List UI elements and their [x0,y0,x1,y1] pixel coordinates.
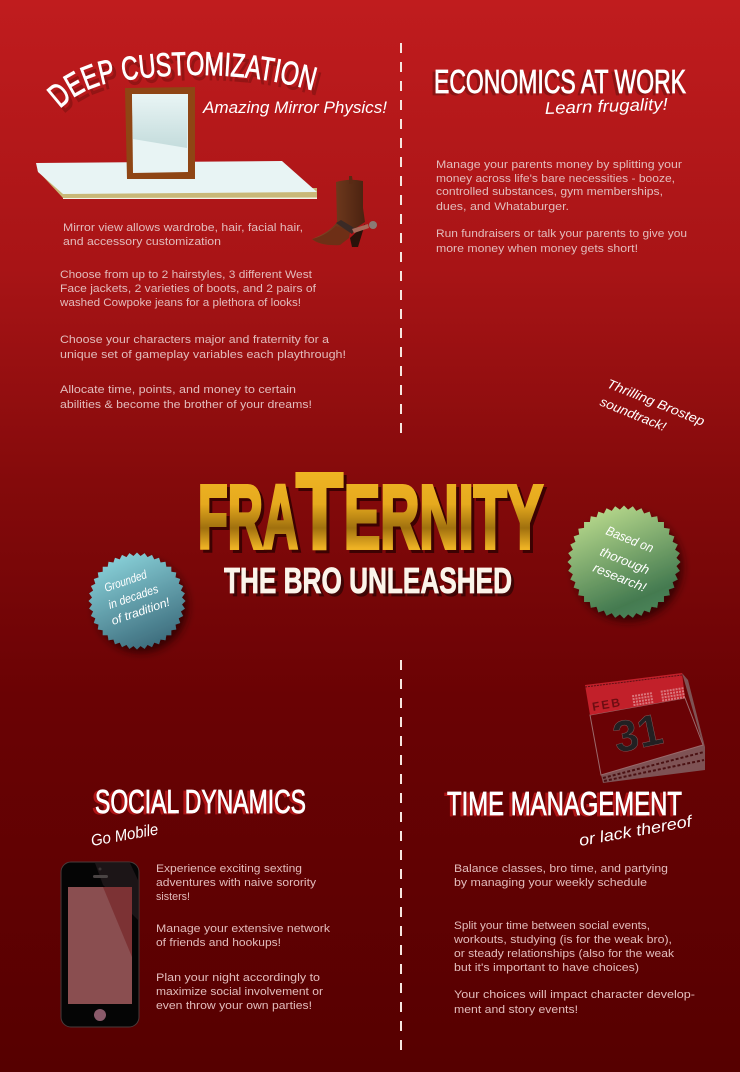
callout: thrilling brostep soundtrack: soundtrack! [598,394,669,434]
text: plan your night [156,972,323,1012]
icon: cowboy boot [312,176,377,247]
text: manage money: money across life's bare necessities - booze, [436,173,675,185]
text: mirror view: Mirror view allows wardrobe, hair, facial hair, [63,222,303,234]
text: plan your night: Plan your night accordingly to [156,972,320,984]
panel: social dynamics [61,783,331,1027]
icon: smartphone [61,862,139,1027]
text: allocate: abilities & become the brother of your dreams! [60,399,312,411]
text: sexting [156,863,317,903]
title: fraternity [198,450,546,574]
text: plan your night: maximize social involvement or [156,986,323,998]
subtitle: the bro unleashed [224,560,515,604]
subtitle: the bro unleashed: THE BRO UNLEASHED [227,563,515,604]
title: fraternity: T [299,453,346,574]
heading: social dynamics [92,783,306,821]
text: network [156,923,331,949]
text: mirror view: and accessory customization [63,236,221,248]
icon: calendar feb 31 [585,673,705,783]
text: your choices: ment and story events! [454,1004,578,1016]
badge: based on thorough research: Based on [604,523,656,556]
text: choose hairstyles: Choose from up to 2 hairstyles, 3 different West [60,269,312,281]
text: sexting: sisters! [156,891,190,903]
text: allocate [60,384,312,411]
text: fundraisers [436,228,687,255]
text: split your time: or steady relationships (also for the weak [454,948,675,960]
subheading: learn frugality: Learn frugality! [544,95,668,118]
heading: social dynamics: SOCIAL DYNAMICS [95,783,306,820]
badge: grounded in decades of tradition: of tradition! [109,595,172,628]
text: fundraisers: more money when money gets short! [436,243,638,255]
subtitle: the bro unleashed: THE BRO UNLEASHED [224,560,512,601]
badge: grounded in decades of tradition: in decades [106,582,160,612]
title: fraternity: ERNITY [344,468,543,568]
heading: social dynamics: SOCIAL DYNAMICS [92,784,303,821]
heading: deep customization: DEEP CUSTOMIZATION [46,51,318,108]
text: choose major: Choose your characters major and fraternity for a [60,334,330,346]
title: fraternity: ERNITY [347,471,546,571]
title: fraternity: FRA [198,468,298,568]
badge: based on thorough research: research! [591,560,649,595]
text: choose hairstyles: washed Cowpoke jeans for a plethora of looks! [59,297,301,309]
text: network: Manage your extensive network [156,923,331,935]
title: fraternity: FRA [201,471,301,571]
text: choose hairstyles [59,269,317,309]
badge: based on thorough research: thorough [598,544,652,577]
subheading: go mobile: Go Mobile [90,821,160,850]
text: choose major: unique set of gameplay variables each playthrough! [60,349,346,361]
text: balance classes: by managing your weekly schedule [454,877,647,889]
text: choose hairstyles: Face jackets, 2 varieties of boots, and 2 pairs of [60,283,317,295]
text: manage money: dues, and Whataburger. [436,201,569,213]
subheading: or lack thereof: or lack thereof [578,813,695,850]
badge: grounded in decades of tradition: Grounded [102,567,149,595]
text: network: of friends and hookups! [156,937,281,949]
title: fraternity: T [296,450,343,571]
text: sexting: adventures with naive sorority [156,877,317,889]
text: manage money: Manage your parents money by splitting your [436,159,682,171]
text: sexting: Experience exciting sexting [156,863,302,875]
panel: time management [444,673,705,1016]
text: split your time [453,920,675,974]
text: split your time: but it's important to have choices) [454,962,639,974]
text: your choices [454,989,695,1016]
text: your choices: Your choices will impact character develop- [454,989,695,1001]
text: mirror view [63,222,303,248]
heading: deep customization: DEEP CUSTOMIZATION [50,56,322,113]
subheading: amazing mirror physics: Amazing Mirror Physics! [202,98,387,117]
text: balance classes: Balance classes, bro time, and partying [454,863,668,875]
icon: mirror on floor [36,87,317,199]
text: split your time: Split your time between social events, [454,920,650,932]
icon: calendar feb 31: 31 [609,705,667,763]
panel: economics at work [431,63,707,434]
text: allocate: Allocate time, points, and money to certain [60,384,296,396]
text: manage money [436,159,682,213]
text: choose major [60,334,346,361]
badge: grounded in decades of tradition [88,552,192,658]
badge: based on thorough research [568,506,688,626]
callout: thrilling brostep soundtrack: Thrilling Brostep [605,376,707,429]
text: fundraisers: Run fundraisers or talk your parents to give you [436,228,687,240]
text: manage money: controlled substances, gym memberships, [436,186,663,198]
text: plan your night: even throw your own parties! [156,1000,312,1012]
text: split your time: workouts, studying (is for the weak bro), [453,934,672,946]
icon: calendar feb 31: FEB [591,695,621,714]
panel: deep customization [36,51,387,411]
text: balance classes [454,863,668,889]
